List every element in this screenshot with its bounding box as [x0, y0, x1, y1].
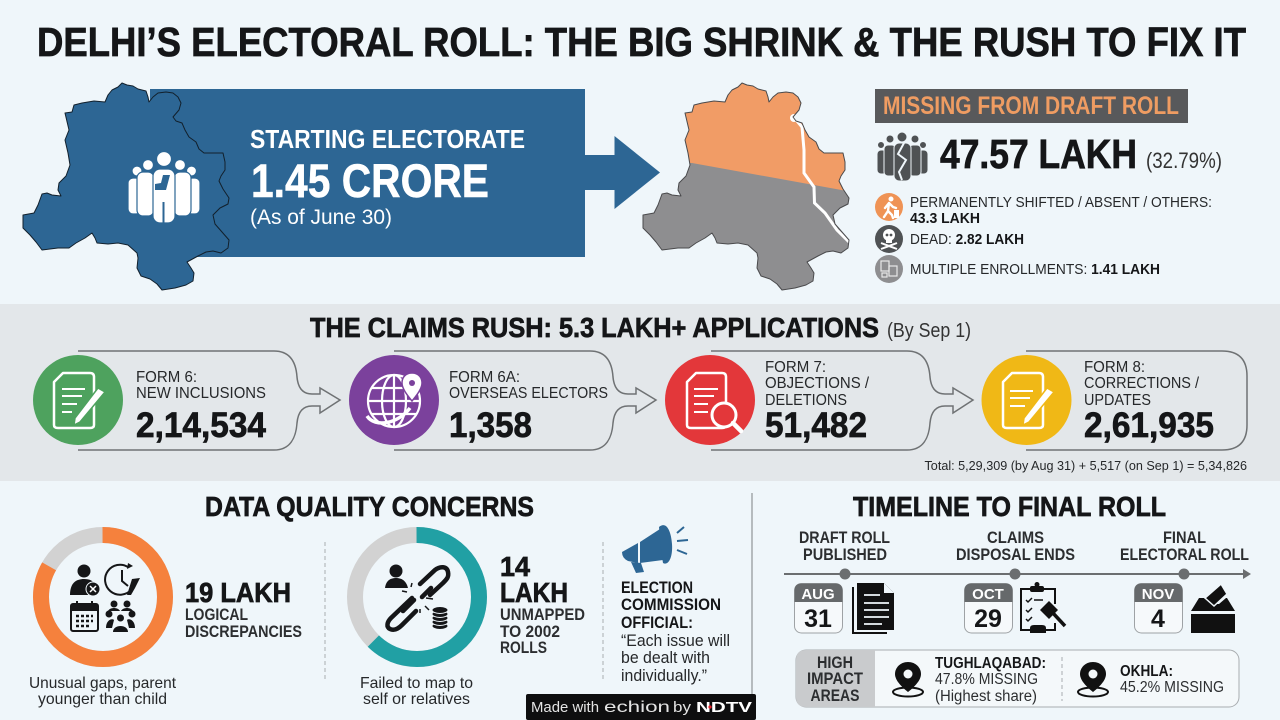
icon: documents	[853, 583, 894, 633]
percentage: (32.79%)	[1146, 148, 1222, 173]
quote: election commission official: individually.”	[621, 666, 707, 685]
card: form 8	[982, 351, 1247, 450]
caption: unusual gaps	[29, 675, 177, 708]
quote: election commission official: COMMISSION	[621, 595, 721, 614]
milestone label: claims disposal	[956, 529, 1075, 564]
card: form 6	[33, 351, 340, 450]
card: form 6: NEW INCLUSIONS	[136, 385, 266, 402]
panel: high impact areas: HIGH	[817, 653, 853, 672]
panel: high impact areas: AREAS	[810, 686, 860, 705]
chart: donut 19 lakh	[41, 535, 165, 659]
card: form 7: OBJECTIONS /	[765, 375, 870, 392]
calendar: Nov 4: NOV	[1142, 586, 1174, 603]
total note: Total: 5,29,309 (by Aug 31) + 5,517 (on Sep 1) = 5,34,826	[924, 459, 1247, 473]
card: form 7: 51,482	[765, 406, 867, 445]
text: multiple enrollments: MULTIPLE ENROLLMENTS: 1.41 LAKH	[910, 261, 1160, 278]
quote: election commission official: be dealt with	[621, 648, 710, 667]
calendar: Aug 31	[794, 584, 842, 633]
card: form 6a: OVERSEAS ELECTORS	[449, 385, 608, 402]
note: as of June 30: (As of June 30)	[250, 206, 392, 229]
watermark: Made with	[531, 700, 599, 716]
icon: clipboard and gavel	[1021, 582, 1065, 633]
card: form 8: 2,61,935	[1084, 406, 1214, 445]
heading: TIMELINE TO FINAL ROLL	[853, 491, 1166, 522]
card: form 8: UPDATES	[1084, 392, 1151, 409]
milestone label: draft roll: PUBLISHED	[803, 546, 887, 564]
calendar: Oct 29: OCT	[972, 586, 1004, 603]
card: form 6: 2,14,534	[136, 406, 267, 445]
card: form 7	[665, 351, 973, 450]
caption: failed to map: self or relatives	[363, 691, 470, 708]
calendar: Oct 29: 29	[974, 605, 1002, 633]
card: form 6a: FORM 6A:	[449, 369, 520, 386]
icon: ballot box	[1191, 584, 1235, 633]
caption: unusual gaps: Unusual gaps, parent	[29, 675, 177, 692]
calendar: Aug 31: AUG	[801, 586, 835, 603]
timeline arrow	[784, 568, 1251, 580]
text: Tughlaqabad	[935, 655, 1046, 705]
calendar: Nov 4	[1134, 584, 1182, 633]
stat: 14 lakh: TO 2002	[500, 622, 560, 641]
text: permanently shifted	[910, 194, 1212, 227]
watermark: by	[673, 700, 692, 716]
map: Delhi blue	[23, 83, 229, 290]
quote: election commission official: “Each issue will	[621, 631, 730, 650]
icon: map pin	[1078, 662, 1108, 696]
panel: the claims rush	[0, 304, 1280, 481]
text: Tughlaqabad: (Highest share)	[935, 688, 1037, 705]
text: Tughlaqabad: TUGHLAQABAD:	[935, 655, 1046, 672]
card: form 8: CORRECTIONS /	[1084, 375, 1199, 392]
calendar: Aug 31: 31	[804, 605, 832, 633]
panel: data quality concerns	[29, 491, 730, 708]
text: Okhla	[1120, 663, 1224, 696]
caption: failed to map	[360, 675, 473, 708]
stat: 14 lakh: LAKH	[500, 577, 568, 608]
icon: multiple enrollments	[875, 255, 903, 283]
icon: crowd	[128, 152, 200, 223]
stat: 19 lakh: 19 LAKH	[185, 577, 291, 608]
text: permanently shifted: PERMANENTLY SHIFTED / ABSENT / OTHERS:	[910, 194, 1212, 211]
quote: election commission official: ELECTION	[621, 578, 693, 597]
number: 1.45 crore: 1.45 CRORE	[251, 154, 489, 207]
stat: 14 lakh: ROLLS	[500, 638, 547, 657]
milestone label: draft roll: DRAFT ROLL	[799, 529, 890, 547]
number: 47.57 lakh: 47.57 LAKH	[940, 131, 1137, 177]
quote: election commission official: OFFICIAL:	[621, 613, 693, 632]
card: form 6a	[349, 351, 656, 450]
icon: broken chain	[385, 564, 448, 630]
icon: shifted person	[875, 193, 903, 221]
chart: donut 14 lakh	[355, 535, 479, 659]
milestone label: final roll	[1120, 529, 1249, 564]
icon: document with magnifier	[687, 373, 741, 431]
stat: 14 lakh: UNMAPPED	[500, 605, 585, 624]
milestone label: claims disposal: CLAIMS	[987, 529, 1044, 547]
stat: 14 lakh: 14	[500, 551, 530, 582]
text: Okhla: 45.2% MISSING	[1120, 679, 1224, 696]
calendar: Oct 29	[964, 584, 1012, 633]
stat: 19 lakh	[185, 577, 302, 641]
text: dead: DEAD: 2.82 LAKH	[910, 231, 1024, 248]
icon: megaphone	[622, 525, 688, 573]
icon: fractured crowd	[877, 132, 928, 181]
icon: map pin	[893, 662, 923, 696]
caption: unusual gaps: younger than child	[38, 691, 167, 708]
card: form 7: FORM 7:	[765, 359, 826, 376]
map: missing share of Delhi	[642, 82, 850, 290]
heading: DATA QUALITY CONCERNS	[205, 491, 534, 522]
panel: high impact areas: IMPACT	[807, 669, 864, 688]
milestone label: draft roll	[799, 529, 890, 564]
card: form 7: DELETIONS	[765, 392, 847, 409]
icon: document with pencil	[1003, 373, 1054, 428]
panel: high impact areas	[796, 650, 1239, 707]
text: Tughlaqabad: 47.8% MISSING	[935, 671, 1038, 688]
panel: starting electorate	[23, 83, 660, 290]
heading badge: MISSING FROM DRAFT ROLL	[883, 92, 1179, 120]
watermark: NDTV	[696, 699, 752, 716]
panel: timeline to final roll	[784, 491, 1251, 707]
card: form 8: FORM 8:	[1084, 359, 1145, 376]
text: Okhla: OKHLA:	[1120, 663, 1173, 680]
watermark: echion	[604, 699, 670, 716]
label: starting electorate: STARTING ELECTORATE	[250, 124, 525, 154]
card: form 6a: 1,358	[449, 406, 532, 445]
icon: skull	[875, 225, 903, 253]
calendar: Nov 4: 4	[1151, 605, 1165, 633]
icon: document with pencil	[54, 373, 105, 428]
milestone label: final roll: ELECTORAL ROLL	[1120, 546, 1249, 564]
quote: election commission official	[621, 578, 730, 685]
milestone label: claims disposal: DISPOSAL ENDS	[956, 546, 1075, 564]
stat: 19 lakh: DISCREPANCIES	[185, 622, 302, 641]
text: permanently shifted: 43.3 LAKH	[910, 211, 980, 227]
stat: 14 lakh	[500, 551, 585, 657]
milestone label: final roll: FINAL	[1163, 529, 1206, 547]
watermark	[526, 694, 756, 720]
icon: discrepancies	[70, 563, 140, 632]
panel: missing from draft roll	[875, 89, 1222, 283]
icon: globe with pin	[367, 373, 422, 427]
caption: failed to map: Failed to map to	[360, 675, 473, 692]
heading: THE CLAIMS RUSH: 5.3 LAKH+ APPLICATIONS	[310, 312, 879, 343]
card: form 6: FORM 6:	[136, 369, 197, 386]
heading: (By Sep 1)	[887, 320, 971, 342]
arrow banner	[150, 89, 660, 257]
stat: 19 lakh: LOGICAL	[185, 605, 248, 624]
